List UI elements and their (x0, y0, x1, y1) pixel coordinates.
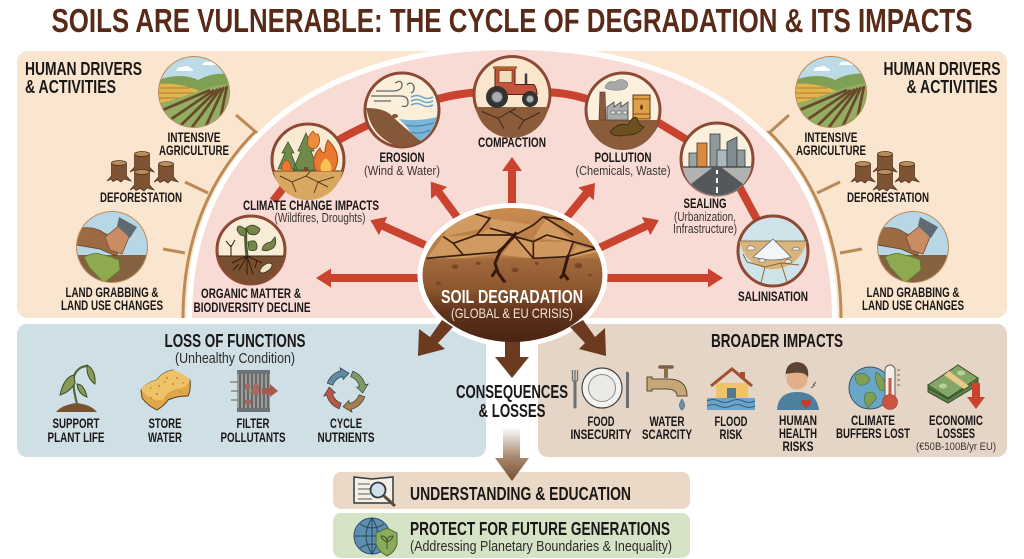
label: sealing: SEALING (684, 196, 726, 211)
cycle ring connecting degradation types (273, 92, 774, 251)
label: climate buffers lost: BUFFERS LOST (836, 426, 911, 441)
label: organic matter (194, 286, 310, 315)
label: water scarcity: WATER (650, 414, 685, 429)
icon: sponge (141, 370, 190, 410)
label: filter pollutants (220, 416, 286, 445)
label: cycle nutrients (318, 416, 374, 445)
panel: understanding and education (333, 472, 690, 509)
panel: human drivers background (17, 51, 1007, 318)
icon: climate change (272, 124, 344, 200)
label: climate buffers lost: CLIMATE (851, 413, 895, 428)
heading: human drivers left (25, 59, 142, 97)
text: protect for future generations: (Addressing Planetary Boundaries & Inequality) (410, 538, 672, 555)
label: consequences and losses: & LOSSES (478, 401, 546, 421)
icon: water tap (647, 367, 687, 410)
label: water scarcity (642, 414, 692, 442)
label: human health risks: HEALTH (779, 426, 817, 441)
label: cycle nutrients: NUTRIENTS (318, 430, 374, 445)
label: store water (148, 416, 182, 445)
label: land grabbing right (862, 285, 964, 313)
arrow: down to understanding (495, 427, 529, 481)
label: support plant life (48, 416, 104, 445)
label: intensive agriculture left: INTENSIVE (168, 130, 220, 145)
label: land grabbing right: LAND USE CHANGES (862, 298, 964, 313)
heading: human drivers right (884, 59, 1000, 97)
label: cycle nutrients: CYCLE (330, 416, 362, 431)
label: erosion: (Wind & Water) (364, 163, 440, 178)
label: pollution: POLLUTION (594, 150, 652, 165)
label: climate change: CLIMATE CHANGE IMPACTS (243, 198, 379, 213)
label: deforestation right: DEFORESTATION (847, 190, 929, 205)
panel: protect for future generations (333, 513, 690, 558)
heading: human drivers left: HUMAN DRIVERS (25, 59, 142, 79)
label: deforestation left: DEFORESTATION (100, 190, 182, 205)
label: intensive agriculture right (796, 130, 866, 158)
icon: intensive agriculture left (158, 56, 230, 130)
icon: pollution (586, 73, 660, 150)
heading: loss of functions (164, 331, 306, 367)
label: erosion (364, 150, 440, 178)
label: consequences and losses: CONSEQUENCES (456, 382, 568, 402)
label: land grabbing left: LAND USE CHANGES (61, 298, 163, 313)
panel: human drivers right (795, 56, 1000, 313)
label: pollution: (Chemicals, Waste) (576, 163, 670, 178)
icon: land grabbing right (877, 211, 949, 285)
label: food insecurity: INSECURITY (570, 427, 632, 442)
label: economic losses: (€50B-100B/yr EU) (916, 441, 996, 453)
label: support plant life: PLANT LIFE (48, 430, 104, 445)
panel: degradation dome (192, 50, 832, 318)
label: water scarcity: SCARCITY (642, 427, 692, 442)
label: soil degradation (441, 287, 583, 321)
icon: globe and thermometer (849, 365, 900, 410)
panel: loss of functions (17, 324, 486, 457)
heading: broader impacts: BROADER IMPACTS (711, 331, 843, 351)
label: human health risks: RISKS (782, 439, 814, 454)
icon: globe and shield (354, 518, 397, 556)
label: store water: WATER (148, 430, 182, 445)
soil white halo (418, 203, 608, 347)
text: protect for future generations: PROTECT FOR FUTURE GENERATIONS (410, 519, 670, 539)
label: intensive agriculture right: INTENSIVE (804, 130, 858, 145)
icon: money and down arrow (928, 365, 985, 409)
label: store water: STORE (148, 416, 182, 431)
icon: unwell person (777, 362, 819, 410)
radial red arrows (316, 157, 723, 288)
label: economic losses (916, 413, 996, 453)
label: filter pollutants: FILTER (236, 416, 270, 431)
label: consequences and losses (456, 382, 568, 421)
label: land grabbing right: LAND GRABBING & (866, 285, 960, 300)
icon: land grabbing left (76, 211, 148, 285)
icon: stumps left (107, 152, 178, 191)
label: flood risk: RISK (720, 427, 743, 442)
icon: intensive agriculture right (795, 56, 867, 130)
bracket arc: drivers connect to dome (162, 114, 862, 318)
icon: plate and cutlery (572, 368, 629, 408)
panel: broader impacts (538, 324, 1007, 457)
label: flood risk: FLOOD (714, 414, 748, 429)
icon: book and magnifier (354, 477, 395, 506)
label: soil degradation: SOIL DEGRADATION (441, 287, 583, 307)
label: erosion: EROSION (380, 150, 424, 165)
label: flood risk (714, 414, 748, 442)
label: compaction: COMPACTION (478, 135, 546, 150)
label: climate buffers lost (836, 413, 911, 441)
icon: salinisation (738, 216, 808, 286)
label: economic losses: LOSSES (937, 426, 975, 441)
label: pollution (576, 150, 670, 178)
heading: loss of functions: LOSS OF FUNCTIONS (164, 331, 306, 351)
icon: erosion (365, 73, 439, 147)
label: sealing: Infrastructure) (673, 221, 737, 236)
label: intensive agriculture left: AGRICULTURE (159, 143, 229, 158)
brown arrows: consequences (418, 320, 606, 378)
label: climate change: (Wildfires, Droughts) (274, 210, 366, 225)
icon: flooded house (707, 369, 755, 410)
label: intensive agriculture right: AGRICULTURE (796, 143, 866, 158)
label: land grabbing left: LAND GRABBING & (66, 285, 159, 300)
label: sealing: (Urbanization, (674, 209, 736, 224)
label: food insecurity (570, 414, 632, 442)
label: salinisation: SALINISATION (738, 289, 808, 304)
label: land grabbing left (61, 285, 163, 313)
icon: stumps right (851, 152, 919, 191)
heading: human drivers right: & ACTIVITIES (906, 77, 998, 97)
label: intensive agriculture left (159, 130, 229, 158)
icon: compaction (474, 56, 550, 138)
label: support plant life: SUPPORT (52, 416, 100, 431)
label: organic matter: BIODIVERSITY DECLINE (194, 300, 310, 315)
icon: filter (230, 370, 278, 412)
heading: loss of functions: (Unhealthy Condition) (175, 350, 295, 367)
label: human health risks: HUMAN (779, 413, 817, 428)
label: climate change (243, 198, 379, 225)
text: understanding and education: UNDERSTANDING & EDUCATION (410, 484, 631, 504)
label: soil degradation: (GLOBAL & EU CRISIS) (451, 305, 573, 321)
label: sealing (673, 196, 737, 236)
icon: wilted plant (56, 365, 97, 412)
icon: sealing (681, 123, 753, 196)
label: human health risks (779, 413, 817, 454)
heading: human drivers left: & ACTIVITIES (25, 77, 116, 97)
text: protect for future generations (410, 519, 672, 555)
label: filter pollutants: POLLUTANTS (220, 430, 286, 445)
label: food insecurity: FOOD (588, 414, 615, 429)
panel: human drivers left (25, 56, 230, 313)
icon: nutrient cycle (324, 368, 368, 412)
label: economic losses: ECONOMIC (929, 413, 983, 428)
label: organic matter: ORGANIC MATTER & (201, 286, 301, 301)
soil degradation core (422, 208, 602, 342)
icon: organic matter (217, 216, 285, 284)
